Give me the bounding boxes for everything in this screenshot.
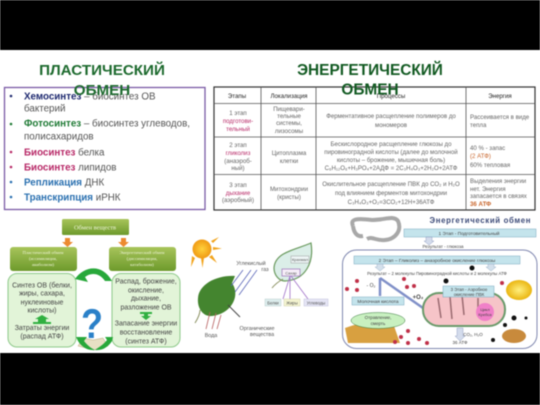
row 2: пировиноградной кислоты (далее до молочной	[324, 149, 458, 156]
panel: breakdown: Распад, брожение,	[115, 278, 177, 286]
arrow: top cycle	[75, 268, 112, 282]
row 2: Цитоплазма	[272, 150, 307, 157]
row 3: нет. Энергия	[470, 186, 506, 193]
icon: muscle tissue	[345, 322, 400, 343]
diagram: small leaf: Сахар	[285, 270, 298, 276]
panel: synthesis: (распад АТФ)	[20, 334, 64, 340]
arrow: organic matter	[228, 305, 240, 317]
list item: chemosynthesis: бактерий	[24, 104, 65, 114]
label: organic matter	[240, 326, 274, 338]
box: energy branch	[109, 247, 176, 271]
list item: transcription: Транскрипция иРНК	[24, 192, 121, 204]
list item: lipid biosynthesis: Биосинтез липидов	[24, 162, 116, 174]
table header: Локализация	[271, 93, 307, 100]
table header: Энергия	[488, 93, 512, 100]
diagram: small leaf: Крахмал	[292, 257, 309, 262]
box: energy branch: (диссимиляция,	[127, 256, 157, 262]
label: poisoning	[351, 312, 405, 328]
icon: black dots	[444, 266, 528, 342]
box: stage 3	[443, 286, 494, 297]
panel: stage 2 and 3 container	[342, 250, 537, 348]
arrow: pyruvate to lactic acid	[379, 278, 381, 296]
list item: photosynthesis: полисахаридов	[24, 132, 94, 142]
row 2: Бескислородное расщепление глюкозы до	[331, 141, 452, 148]
heading: plastic metabolism: ПЛАСТИЧЕСКИЙ	[39, 61, 165, 79]
icon: mitochondrion	[423, 293, 505, 326]
panel: synthesis	[8, 274, 76, 347]
row 1: лизосомы	[275, 128, 303, 135]
arrow: to mitochondrion	[380, 278, 423, 308]
arrows: stage 1 to result	[424, 237, 434, 252]
row 2: 40 % - запас	[470, 145, 505, 152]
box: lactic acid	[352, 297, 404, 305]
table header: Этапы	[228, 93, 246, 100]
row 3: дыхание	[226, 190, 251, 197]
top black bar	[0, 0, 540, 50]
panel: synthesis: нуклеиновые	[21, 300, 64, 306]
row 3: запасается в связях	[470, 193, 527, 200]
row 1: Пищевари-	[273, 106, 305, 113]
row 2: (анаэроб-	[224, 158, 252, 165]
arrows: down to branches	[62, 238, 129, 247]
row 2: С₆Н₁₂О₆+Н₃РО₄+2АДФ = 2С₃Н₄О₃+2Н₂О+2АТФ	[325, 165, 458, 172]
icon: brown tissue	[502, 329, 526, 343]
label: carbon dioxide: Углекислый	[236, 260, 266, 267]
label: organic matter: вещества	[250, 332, 274, 338]
box: stage 3: окисление ПВК	[454, 292, 485, 297]
label: glucose result: Результат - глюкоза	[422, 244, 464, 249]
bottom black bar	[0, 353, 540, 405]
icon: dots	[345, 277, 504, 345]
arrow: down to ATP	[455, 328, 465, 341]
row 2: 2 этап	[229, 142, 247, 149]
row 1: Ферментативное расщепление полимеров до	[326, 113, 456, 120]
panel: breakdown: разложение ОВ	[120, 304, 172, 312]
label: carbohydrates: Углеводы	[307, 300, 325, 306]
label: 36 ATP: 36 АТФ	[453, 340, 468, 345]
row 3: (аэробный)	[222, 197, 254, 204]
row 3	[222, 178, 527, 208]
list item: chemosynthesis	[10, 92, 156, 114]
list item: photosynthesis: Фотосинтез – биосинтез углеводов,	[24, 118, 190, 130]
row 3: 3 этап	[229, 182, 247, 189]
row 1: тельный	[226, 126, 250, 133]
box: plastic branch: (ассимиляция,	[29, 256, 57, 262]
row 1: 1 этап	[229, 110, 247, 117]
heading: energy metabolism: ОБМЕН	[341, 82, 399, 98]
icon: mitochondrion: Цикл	[480, 307, 490, 312]
panel: breakdown: (синтез АТФ)	[125, 338, 167, 346]
icon: large leaf	[198, 276, 235, 316]
label: carbon dioxide	[236, 260, 269, 273]
row 1: мономеров	[375, 122, 407, 129]
row 3: Окислительное расщепление ПВК до СО₂ и Н₂О	[322, 181, 460, 188]
diagram: metabolism scheme	[8, 219, 180, 350]
arrow: bottom right cycle	[95, 337, 113, 350]
box: lactic acid: Молочная кислота	[357, 299, 399, 305]
table: stages of energy metabolism	[214, 87, 535, 210]
row 2: кислоты – брожение, мышечная боль)	[337, 157, 445, 164]
panel: synthesis: кислоты)	[28, 308, 56, 314]
label: organic matter: Органические	[240, 326, 274, 332]
box: energy branch: катаболизм)	[130, 262, 154, 267]
label: minus oxygen: - О₂	[367, 283, 375, 289]
icon: question mark: ?	[81, 301, 103, 348]
row 3: С₃Н₄О₃+О₂=3СО₂+12Н+36АТФ	[348, 199, 435, 206]
row 1: тепла	[470, 122, 487, 129]
row 2: 60% тепловая	[470, 162, 510, 169]
row 2: клетки	[280, 158, 298, 165]
panel: breakdown: восстановление	[120, 330, 172, 336]
arrows: carbon dioxide	[231, 270, 257, 295]
box: energy branch: Энергетический обмен	[120, 250, 165, 255]
table header	[228, 93, 512, 100]
row 3: под влиянием ферментов митохондрии	[335, 190, 447, 197]
list item: chemosynthesis: Хемосинтез – биосинтез ОВ	[24, 92, 156, 102]
box: plastic branch: Пластический обмен	[23, 250, 64, 255]
panel: breakdown: Запасание энергии	[115, 320, 177, 328]
box: stage 1: 1 Этап - Подготовительный	[439, 230, 500, 237]
box: plastic branch	[10, 247, 77, 271]
row 2: гликолиз	[226, 150, 251, 157]
arrow: bottom left cycle	[76, 337, 95, 350]
list item: DNA replication: Репликация ДНК	[24, 178, 104, 188]
row 3: Выделения энергии	[470, 178, 526, 185]
row 2: ный)	[231, 165, 245, 172]
row 1	[223, 106, 530, 135]
table header: Процессы	[377, 93, 405, 100]
label: poisoning: смерть	[371, 321, 386, 326]
icon: open book	[78, 338, 108, 350]
label: water: Вода	[205, 333, 217, 339]
heading: plastic metabolism: ОБМЕН	[74, 82, 130, 99]
row 1: тельные	[277, 113, 301, 120]
panel: breakdown: дыхание,	[131, 296, 161, 302]
icon: mitochondrion: Кребса	[478, 312, 492, 317]
label: carbon dioxide: газ	[261, 267, 269, 273]
row 2	[224, 141, 510, 172]
row 1: подготови-	[223, 118, 253, 125]
row 3: 36 АТФ	[470, 201, 491, 208]
icon: intestine	[352, 218, 399, 240]
arrows: water	[206, 312, 221, 329]
label: fats: Жиры	[286, 300, 298, 306]
label: plus oxygen: +О₂	[413, 295, 424, 301]
list item: photosynthesis	[10, 118, 190, 142]
diagram: photosynthesis	[191, 237, 328, 339]
diagram: small leaf	[272, 243, 312, 299]
row 3: (кристы)	[277, 194, 301, 201]
panel: breakdown	[112, 274, 180, 347]
icon: fat droplet	[506, 280, 532, 300]
box: stage 2	[354, 256, 520, 264]
panel: synthesis: Синтез ОВ (белки,	[12, 282, 72, 290]
row 3: Митохондрии	[270, 186, 308, 193]
panel: breakdown: окисление,	[128, 288, 164, 294]
panel: plastic metabolism list	[4, 88, 205, 210]
heading: plastic metabolism	[39, 61, 165, 99]
arrow: leaf stem	[195, 310, 200, 323]
arrows: stage 2 result	[375, 264, 496, 271]
diagram: energy metabolism stages	[342, 216, 537, 348]
box: metabolism header: Обмен веществ	[74, 224, 116, 232]
heading: energy metabolism	[297, 61, 443, 98]
box: stage 3: 3 Этап - Аэробное	[451, 287, 488, 292]
heading: energy metabolism: ЭНЕРГЕТИЧЕСКИЙ	[297, 61, 443, 79]
box: stage 1	[404, 229, 536, 237]
heading: energy metabolism: Энергетический обмен	[430, 216, 531, 225]
box: plastic branch: анаболизм)	[32, 262, 54, 267]
row 1: Рассеивается в виде	[470, 114, 530, 121]
label: glycolysis result: Результат – 2 молекулы Пировиноградной кислоты и 2 молекулы АТФ	[367, 271, 508, 276]
label: poisoning: Отравление,	[365, 315, 391, 320]
box: stage 2: 2 Этап – Гликолиз – анаэробное окисление глюкозы	[379, 258, 496, 264]
row 2: (2 АТФ)	[470, 153, 491, 160]
panel: synthesis: жиры, сахара,	[19, 290, 65, 298]
icon: sun	[191, 237, 222, 268]
box: metabolism header	[62, 219, 129, 235]
row 1: системы,	[276, 120, 302, 127]
label: proteins: Белки	[267, 300, 279, 306]
label: CO2 and water: CO₂, H₂O	[463, 332, 483, 337]
panel: synthesis: Затраты энергии	[15, 325, 69, 332]
list item: protein biosynthesis: Биосинтез белка	[24, 148, 105, 158]
